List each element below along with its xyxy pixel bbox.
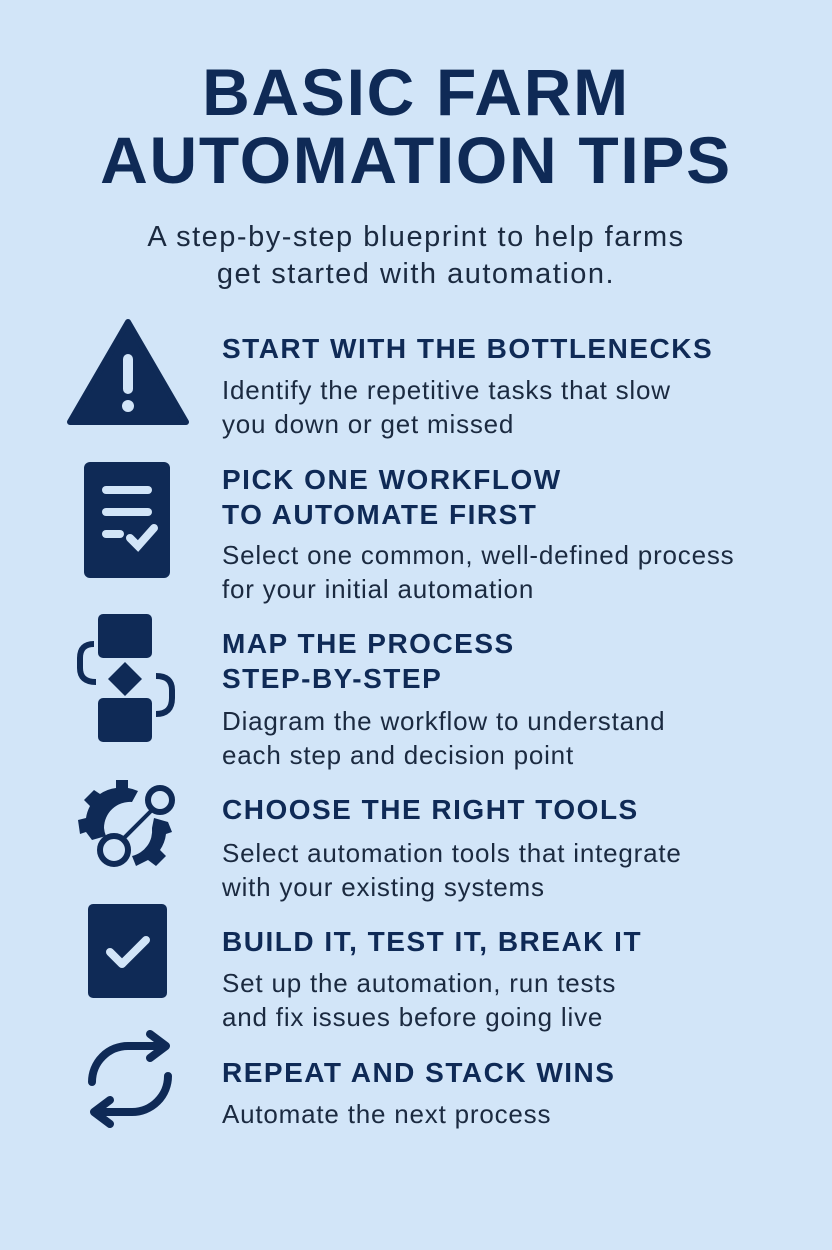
- step 2: [222, 464, 562, 530]
- step 2: PICK ONE WORKFLOW: [222, 464, 562, 495]
- step 2: TO AUTOMATE FIRST: [222, 499, 537, 530]
- icon: repeat arrows: [88, 1030, 172, 1128]
- step 3: [222, 628, 515, 694]
- text: Diagram the workflow to understand: [222, 706, 665, 736]
- step 1: START WITH THE BOTTLENECKS: [222, 333, 713, 364]
- icon: checkbox: [88, 904, 167, 998]
- title: AUTOMATION TIPS: [100, 123, 732, 197]
- step 3: STEP-BY-STEP: [222, 663, 442, 694]
- text: for your initial automation: [222, 574, 534, 604]
- text: with your existing systems: [222, 872, 545, 902]
- text: each step and decision point: [222, 740, 574, 770]
- icon: gear tools: [78, 780, 175, 867]
- step 6: REPEAT AND STACK WINS: [222, 1057, 615, 1088]
- text: Set up the automation, run tests: [222, 968, 616, 998]
- text: you down or get missed: [222, 409, 514, 439]
- subtitle: get started with automation.: [217, 258, 615, 290]
- icon: checklist doc: [84, 462, 170, 578]
- icon: flowchart: [77, 614, 175, 742]
- title: BASIC FARM: [202, 55, 630, 129]
- icon: warning: [67, 319, 189, 425]
- step 3: MAP THE PROCESS: [222, 628, 515, 659]
- title: [100, 55, 732, 197]
- text: Select one common, well-defined process: [222, 540, 734, 570]
- text: and fix issues before going live: [222, 1002, 603, 1032]
- text: Identify the repetitive tasks that slow: [222, 375, 671, 405]
- step 4: CHOOSE THE RIGHT TOOLS: [222, 794, 639, 825]
- text: Select automation tools that integrate: [222, 838, 682, 868]
- subtitle: A step-by-step blueprint to help farms: [147, 221, 685, 253]
- text: Automate the next process: [222, 1099, 551, 1129]
- subtitle: [147, 221, 685, 290]
- step 5: BUILD IT, TEST IT, BREAK IT: [222, 926, 642, 957]
